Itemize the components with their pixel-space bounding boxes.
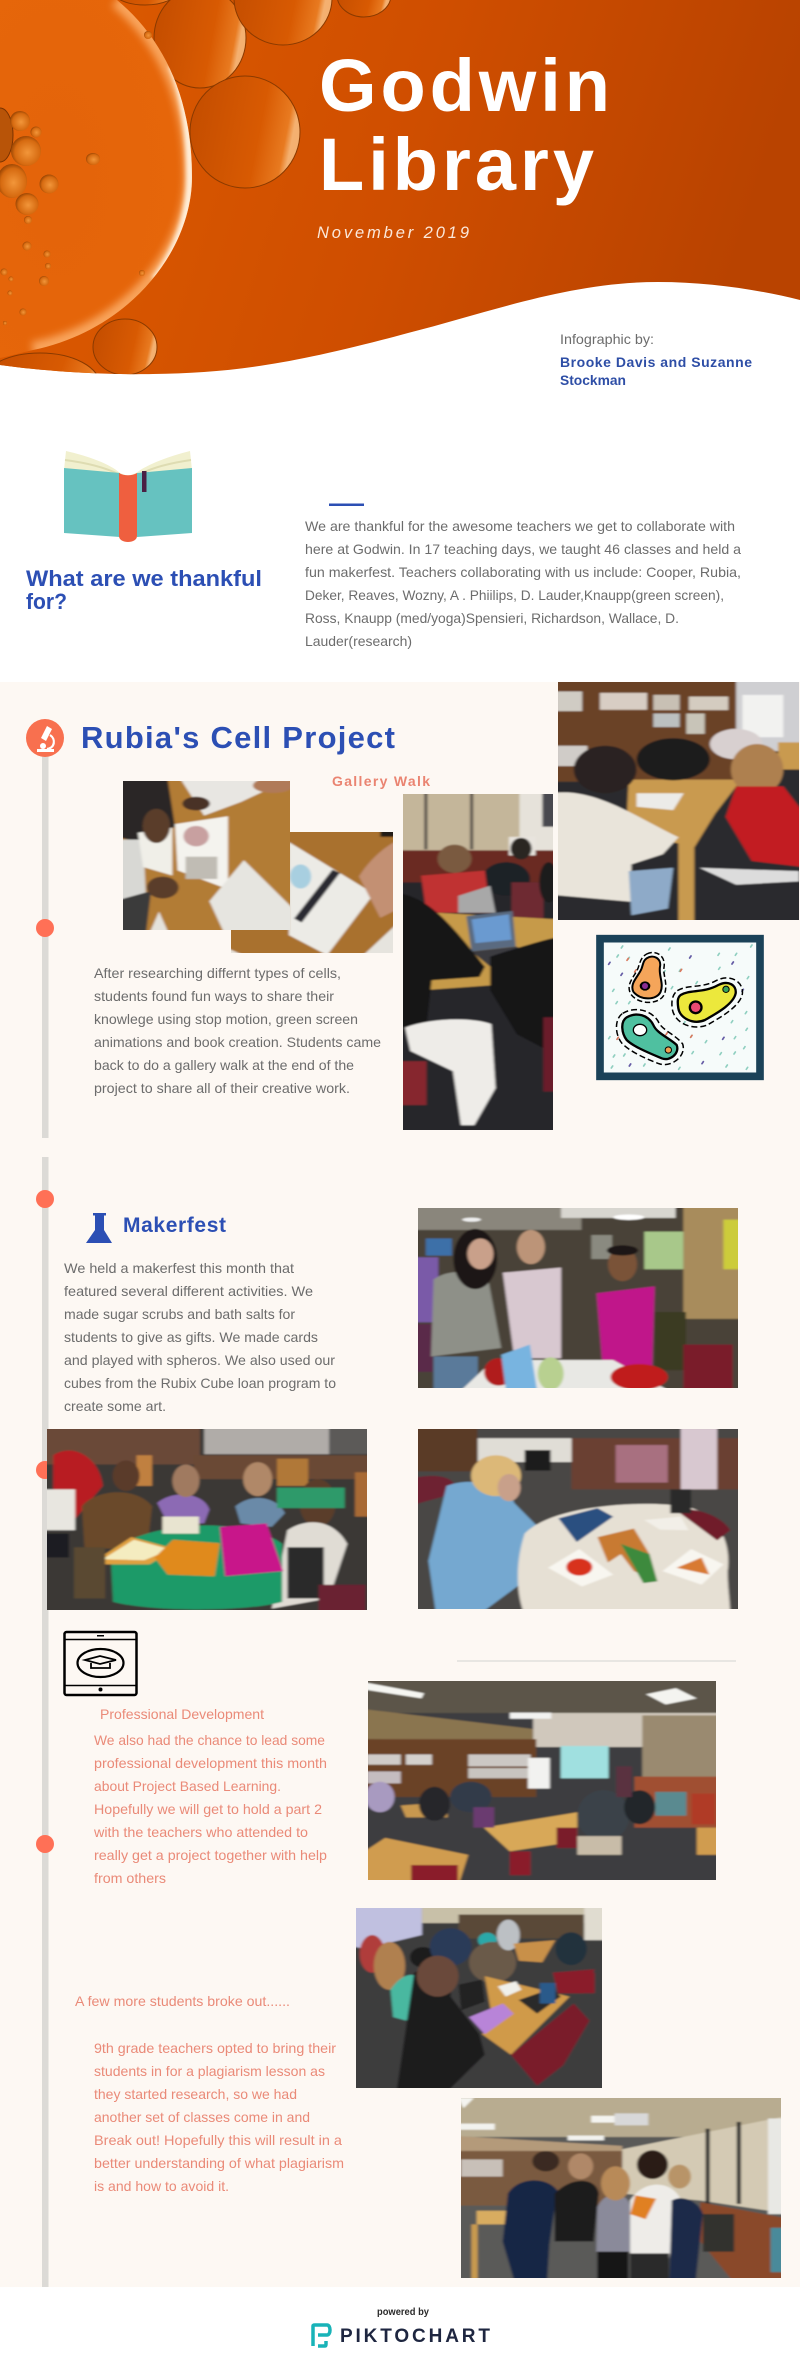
- makerfest paragraph: students to give as gifts. We made cards: [64, 1329, 318, 1345]
- photo: notebook on table: [231, 832, 393, 953]
- icon: flask: [86, 1213, 112, 1243]
- cell project paragraph: After researching differnt types of cells,: [94, 965, 341, 981]
- heading: a few more students: A few more students broke out......: [75, 1993, 290, 2009]
- icon: tablet with graduation cap: [64, 1632, 136, 1695]
- makerfest paragraph: made sugar scrubs and bath salts for: [64, 1306, 295, 1322]
- plagiarism paragraph: they started research, so we had: [94, 2086, 297, 2102]
- cell project paragraph: project to share all of their creative work.: [94, 1080, 350, 1096]
- credits: [560, 331, 752, 388]
- footer: powered by Piktochart: PIKTOCHART: [340, 2326, 490, 2347]
- photo: students around table: [558, 682, 799, 920]
- plagiarism paragraph: Break out! Hopefully this will result in a: [94, 2132, 342, 2148]
- green cell: [616, 1010, 683, 1065]
- timeline dot: [36, 1461, 54, 1479]
- date: November 2019: [317, 224, 469, 242]
- thankful paragraph: Lauder(research): [305, 633, 412, 649]
- hero banner: [0, 0, 800, 374]
- title: Godwin: [319, 44, 610, 127]
- photo: hands on cell worksheets: [123, 781, 290, 930]
- title: Library: [319, 123, 594, 206]
- plagiarism paragraph: another set of classes come in and: [94, 2109, 310, 2125]
- professional development paragraph: really get a project together with help: [94, 1847, 327, 1863]
- professional development paragraph: with the teachers who attended to: [93, 1824, 308, 1840]
- makerfest paragraph: create some art.: [64, 1398, 166, 1414]
- label: Gallery Walk: Gallery Walk: [332, 773, 430, 789]
- cell spots: [609, 945, 752, 1069]
- title: [319, 44, 610, 206]
- cell project paragraph: knowlege using stop motion, green screen: [94, 1011, 358, 1027]
- credits: Infographic by:: [560, 331, 654, 347]
- timeline bar lower: [42, 1157, 48, 2287]
- plagiarism paragraph: better understanding of what plagiarism: [94, 2155, 344, 2171]
- divider line: [457, 1660, 736, 1662]
- thankful paragraph: fun makerfest. Teachers collaborating with us include: Cooper, Rubia,: [305, 564, 741, 580]
- heading: Makerfest: Makerfest: [123, 1214, 226, 1237]
- plagiarism paragraph: 9th grade teachers opted to bring their: [94, 2040, 336, 2056]
- makerfest paragraph: featured several different activities. We: [64, 1283, 313, 1299]
- photo: breakout students: [356, 1908, 602, 2088]
- makerfest paragraph: We held a makerfest this month that: [64, 1260, 294, 1276]
- heading: Professional Development: Professional Development: [100, 1706, 264, 1722]
- photo: makerfest card table: [47, 1429, 367, 1610]
- thankful paragraph: Ross, Knaupp (med/yoga)Spensieri, Richardson, Wallace, D.: [305, 610, 679, 626]
- footer: powered by Piktochart: powered by: [377, 2307, 429, 2318]
- professional development paragraph: from others: [94, 1870, 166, 1886]
- cell project paragraph: animations and book creation. Students came: [94, 1034, 381, 1050]
- professional development paragraph: [93, 1732, 327, 1886]
- cell project paragraph: [94, 965, 381, 1096]
- photo: Rubik's cube art: [418, 1429, 738, 1609]
- orange cell: [629, 952, 666, 1002]
- orange bubble background: [0, 0, 800, 374]
- cell project paragraph: back to do a gallery walk at the end of the: [94, 1057, 354, 1073]
- professional development paragraph: about Project Based Learning.: [94, 1778, 281, 1794]
- timeline bar upper: [42, 738, 48, 1138]
- footer: powered by Piktochart: [313, 2307, 490, 2347]
- professional development paragraph: Hopefully we will get to hold a part 2: [94, 1801, 322, 1817]
- credits: Brooke Davis and Suzanne: [560, 354, 752, 370]
- icon: Piktochart logo: [313, 2325, 330, 2346]
- timeline dot: [36, 919, 54, 937]
- heading: what are we thankful for: What are we thankful: [26, 566, 262, 591]
- makerfest paragraph: cubes from the Rubix Cube loan program to: [64, 1375, 336, 1391]
- icon: microscope badge: [26, 719, 64, 757]
- makerfest paragraph: [64, 1260, 336, 1414]
- icon: cell illustration: [596, 934, 764, 1080]
- timeline dot: [36, 1835, 54, 1853]
- thankful paragraph: here at Godwin. In 17 teaching days, we taught 46 classes and held a: [305, 541, 741, 557]
- credits: Stockman: [560, 372, 626, 388]
- accent dash: [329, 504, 364, 506]
- timeline dot: [36, 1190, 54, 1208]
- heading: what are we thankful for: [26, 566, 262, 614]
- cell frame: [600, 939, 760, 1076]
- plagiarism paragraph: [94, 2040, 344, 2194]
- heading: Rubia's Cell Project: Rubia's Cell Project: [81, 720, 395, 755]
- heading: what are we thankful for: for?: [26, 589, 67, 614]
- panel: cream timeline background: [0, 682, 800, 2287]
- thankful paragraph: [305, 518, 741, 649]
- makerfest paragraph: and played with spheros. We also used our: [64, 1352, 335, 1368]
- photo: professional development room: [368, 1681, 716, 1880]
- icon: open book: [64, 451, 192, 542]
- photo: three students at makerfest: [418, 1208, 738, 1388]
- thankful paragraph: Deker, Reaves, Wozny, A . Phiilips, D. Lauder,Knaupp(green screen),: [305, 587, 724, 603]
- professional development paragraph: professional development this month: [94, 1755, 327, 1771]
- photo: group with book: [461, 2098, 781, 2278]
- cell project paragraph: students found fun ways to share their: [94, 988, 334, 1004]
- plagiarism paragraph: students in for a plagiarism lesson as: [94, 2063, 325, 2079]
- yellow cell: [672, 978, 742, 1027]
- plagiarism paragraph: is and how to avoid it.: [94, 2178, 229, 2194]
- photo: student with laptop: [403, 794, 553, 1130]
- professional development paragraph: We also had the chance to lead some: [94, 1732, 325, 1748]
- thankful paragraph: We are thankful for the awesome teachers we get to collaborate with: [305, 518, 735, 534]
